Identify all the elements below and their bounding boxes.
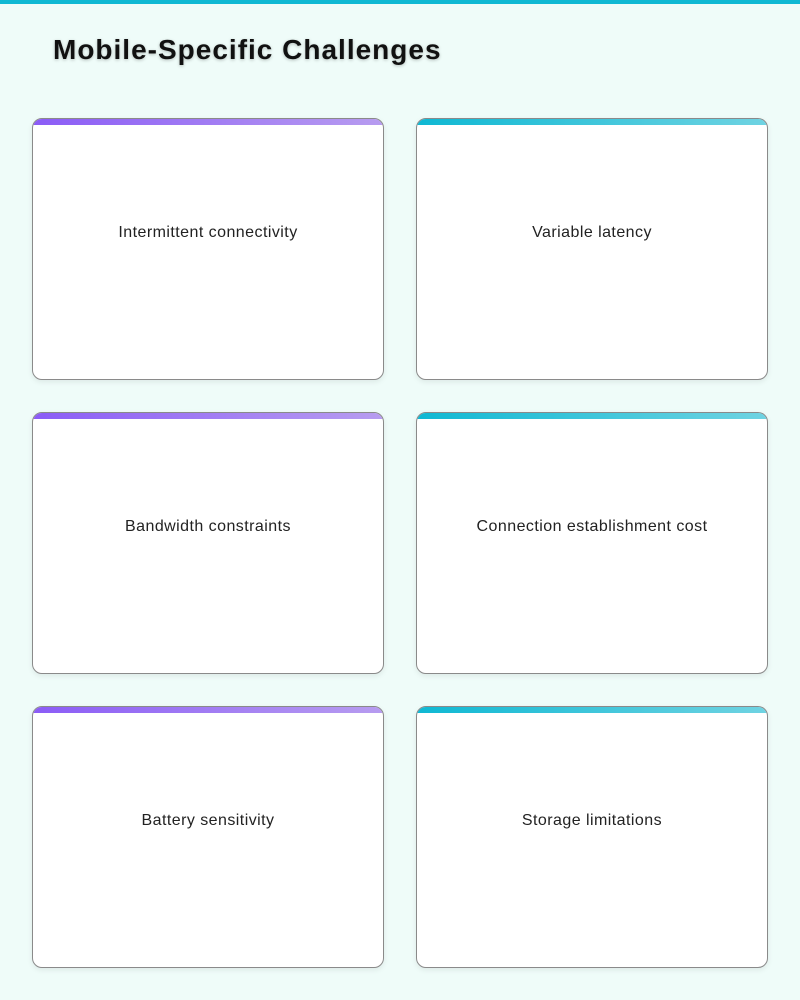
card: storage limitations [416, 706, 768, 968]
card: intermittent connectivity [32, 118, 384, 380]
card: intermittent connectivity: Intermittent connectivity [118, 224, 298, 241]
card: variable latency: Variable latency [532, 224, 652, 241]
card: connection establishment cost: Connection establishment cost [477, 518, 707, 535]
card: battery sensitivity: Battery sensitivity [141, 812, 275, 829]
card: bandwidth constraints [32, 412, 384, 674]
card: battery sensitivity [32, 706, 384, 968]
card: bandwidth constraints: Bandwidth constraints [125, 518, 291, 535]
card: variable latency [416, 118, 768, 380]
card: storage limitations: Storage limitations [522, 812, 662, 829]
top accent bar [0, 0, 800, 4]
title: Mobile-Specific Challenges [53, 34, 442, 65]
card: connection establishment cost [416, 412, 768, 674]
